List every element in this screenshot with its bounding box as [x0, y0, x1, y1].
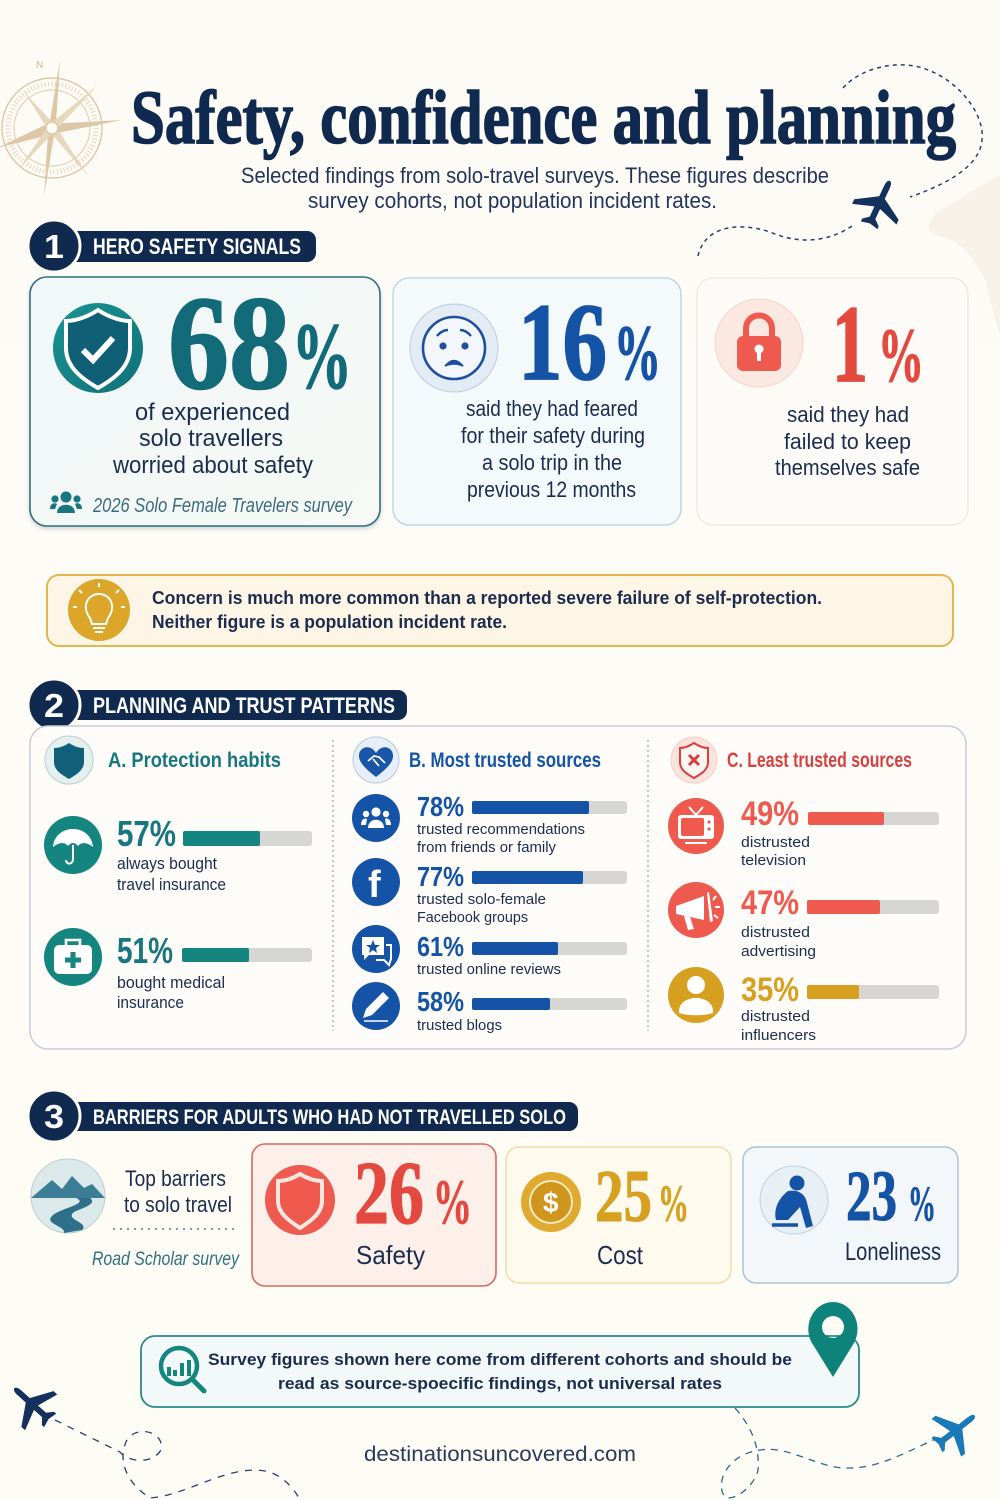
stat: 35 percent	[668, 967, 939, 1044]
dashed flight path: bottom left	[55, 1420, 300, 1500]
stat: 61 percent: trusted online reviews	[417, 961, 561, 978]
icon: location pin	[808, 1302, 858, 1377]
section 3 heading	[28, 1090, 578, 1142]
stat: 78 percent: 78%	[417, 791, 464, 822]
stat: 58 percent: 58%	[417, 986, 464, 1017]
description: of experienced	[135, 399, 290, 426]
icon: plane bottom right	[922, 1397, 989, 1464]
icon: influencer person	[668, 967, 724, 1023]
note text: read as source-spoecific findings, not universal rates	[278, 1374, 722, 1393]
icon: light bulb	[68, 579, 130, 641]
stat: 25	[595, 1156, 652, 1238]
stat: %	[878, 314, 924, 398]
icon: seated person	[760, 1166, 828, 1234]
map texture	[928, 175, 1000, 335]
icon: review bubbles	[352, 925, 400, 973]
icon: compass rose	[0, 60, 122, 196]
column A: protection habits	[44, 736, 312, 1012]
stat: 57 percent	[44, 813, 312, 894]
stat: 58 percent: trusted blogs	[417, 1017, 502, 1034]
label: Loneliness	[845, 1238, 941, 1266]
column B: most trusted	[352, 737, 627, 1034]
stat: 57 percent: 57%	[117, 813, 176, 854]
label: Safety	[356, 1240, 425, 1270]
heading A: A. Protection habits	[108, 749, 281, 772]
panel: 68 percent	[30, 269, 380, 526]
panel: loneliness 23 percent	[743, 1147, 958, 1283]
heading C: C. Least trusted sources	[727, 749, 912, 772]
stat: %	[908, 1175, 936, 1231]
section 3 heading: 3	[44, 1098, 64, 1135]
icon: pencil	[352, 982, 400, 1030]
callout text	[152, 588, 822, 632]
stat: 61 percent	[352, 925, 627, 978]
panel: 16 percent	[393, 278, 681, 525]
icon: umbrella	[44, 816, 102, 874]
stat: 49 percent: distrusted	[741, 834, 810, 851]
dashed flight path: bottom right	[721, 1408, 938, 1498]
description: said they had feared	[466, 396, 638, 421]
stat: 47 percent: 47%	[741, 884, 799, 922]
barriers label	[124, 1166, 232, 1217]
stat: 57 percent: travel insurance	[117, 875, 226, 894]
callout text: Concern is much more common than a reported severe failure of self-protection.	[152, 588, 822, 608]
icon: medical kit	[44, 928, 102, 986]
stat	[832, 283, 924, 405]
panel: safety 26 percent	[252, 1144, 496, 1286]
source: 2026 Solo Female Travelers survey	[92, 495, 353, 517]
description: worried about safety	[112, 452, 313, 479]
description: a solo trip in the	[482, 450, 622, 475]
stat: %	[433, 1166, 472, 1237]
icon: facebook	[352, 858, 400, 906]
section 1 heading: 1	[44, 228, 64, 265]
description	[461, 396, 645, 502]
stat: %	[292, 305, 352, 409]
label: Cost	[597, 1240, 644, 1270]
callout text: Neither figure is a population incident rate.	[152, 612, 507, 632]
icon: magnifier with bars	[161, 1348, 204, 1391]
stat: 77 percent: trusted solo-female	[417, 891, 546, 908]
icon: friends and family	[352, 794, 400, 842]
section 2 heading: 2	[44, 687, 64, 724]
stat: 35 percent: influencers	[741, 1027, 816, 1044]
stat: 35 percent: 35%	[741, 971, 799, 1009]
stat: 51 percent: 51%	[117, 930, 173, 971]
icon: shield cross	[671, 737, 717, 783]
icon: shield	[45, 736, 93, 784]
stat: 49 percent	[668, 795, 939, 869]
section 2 heading	[28, 679, 407, 731]
footer url: destinationsuncovered.com	[364, 1443, 636, 1466]
stat: 58 percent	[352, 982, 627, 1034]
stat: 61 percent: 61%	[417, 931, 464, 962]
icon: coin: $	[543, 1187, 559, 1218]
stat: 68	[168, 269, 290, 417]
icon: plane top	[847, 171, 912, 236]
stat: 16	[518, 281, 607, 403]
barriers label: to solo travel	[124, 1192, 232, 1217]
note: survey figures	[141, 1336, 859, 1407]
source: Road Scholar survey	[92, 1249, 240, 1270]
description: for their safety during	[461, 423, 645, 448]
column C: least trusted	[668, 737, 939, 1044]
stat: 77 percent	[352, 858, 627, 926]
stat: 47 percent: advertising	[741, 943, 816, 960]
panel: cost 25 percent	[506, 1147, 731, 1283]
stat: %	[658, 1176, 689, 1233]
description	[112, 399, 313, 479]
stat: 35 percent: distrusted	[741, 1008, 810, 1025]
icon: shield	[265, 1165, 335, 1235]
subtitle: survey cohorts, not population incident rates.	[308, 188, 717, 213]
stat: 1	[832, 283, 868, 405]
icon: plane bottom left	[0, 1370, 66, 1438]
stat: 77 percent: Facebook groups	[417, 909, 528, 926]
barriers label: Top barriers	[125, 1166, 226, 1191]
stat: 47 percent: distrusted	[741, 924, 810, 941]
icon: megaphone	[668, 882, 724, 938]
icon: compass rose: N	[36, 60, 43, 71]
heading B: B. Most trusted sources	[409, 749, 601, 772]
section 1 heading: HERO SAFETY SIGNALS	[93, 234, 301, 259]
subtitle	[241, 163, 829, 213]
stat: 51 percent: insurance	[117, 993, 184, 1012]
icon: coin	[521, 1172, 581, 1232]
description: solo travellers	[139, 425, 283, 452]
section 1 heading	[28, 220, 316, 272]
icon: heart handshake	[353, 737, 399, 783]
icon: facebook: f	[368, 864, 381, 906]
stat: 51 percent: bought medical	[117, 973, 225, 992]
icon: television	[668, 798, 724, 854]
note text: Survey figures shown here come from different cohorts and should be	[208, 1350, 792, 1369]
description: failed to keep	[784, 429, 911, 454]
stat: 57 percent: always bought	[117, 854, 217, 873]
stat: 26	[354, 1144, 424, 1243]
stat: 49 percent: 49%	[741, 795, 799, 833]
panel: 1 percent	[697, 278, 968, 525]
stat: 49 percent: television	[741, 852, 806, 869]
description: said they had	[787, 402, 909, 427]
section 2 heading: PLANNING AND TRUST PATTERNS	[93, 693, 395, 718]
note text	[208, 1350, 792, 1393]
icon: shield check	[53, 303, 143, 393]
description: previous 12 months	[467, 477, 636, 502]
icon: people	[50, 492, 82, 513]
stat: 23	[846, 1156, 897, 1236]
icon: padlock	[715, 299, 803, 387]
stat: 51 percent	[44, 928, 312, 1012]
stat: 78 percent: from friends or family	[417, 839, 556, 856]
icon: mountains and road	[31, 1159, 105, 1233]
stat: 78 percent: trusted recommendations	[417, 821, 585, 838]
dashed flight path: top	[698, 65, 982, 256]
stat: %	[614, 309, 661, 396]
barriers intro	[31, 1159, 240, 1270]
section 3 heading: BARRIERS FOR ADULTS WHO HAD NOT TRAVELLED SOLO	[93, 1106, 566, 1129]
stat: 78 percent	[352, 791, 627, 856]
callout: concern	[47, 575, 953, 646]
subtitle: Selected findings from solo-travel surveys. These figures describe	[241, 163, 829, 188]
description	[775, 402, 920, 480]
description: themselves safe	[775, 455, 920, 480]
icon: worried face	[410, 304, 498, 392]
stat: 47 percent	[668, 882, 939, 960]
panel: planning and trust	[30, 726, 966, 1049]
stat: 77 percent: 77%	[417, 861, 464, 892]
